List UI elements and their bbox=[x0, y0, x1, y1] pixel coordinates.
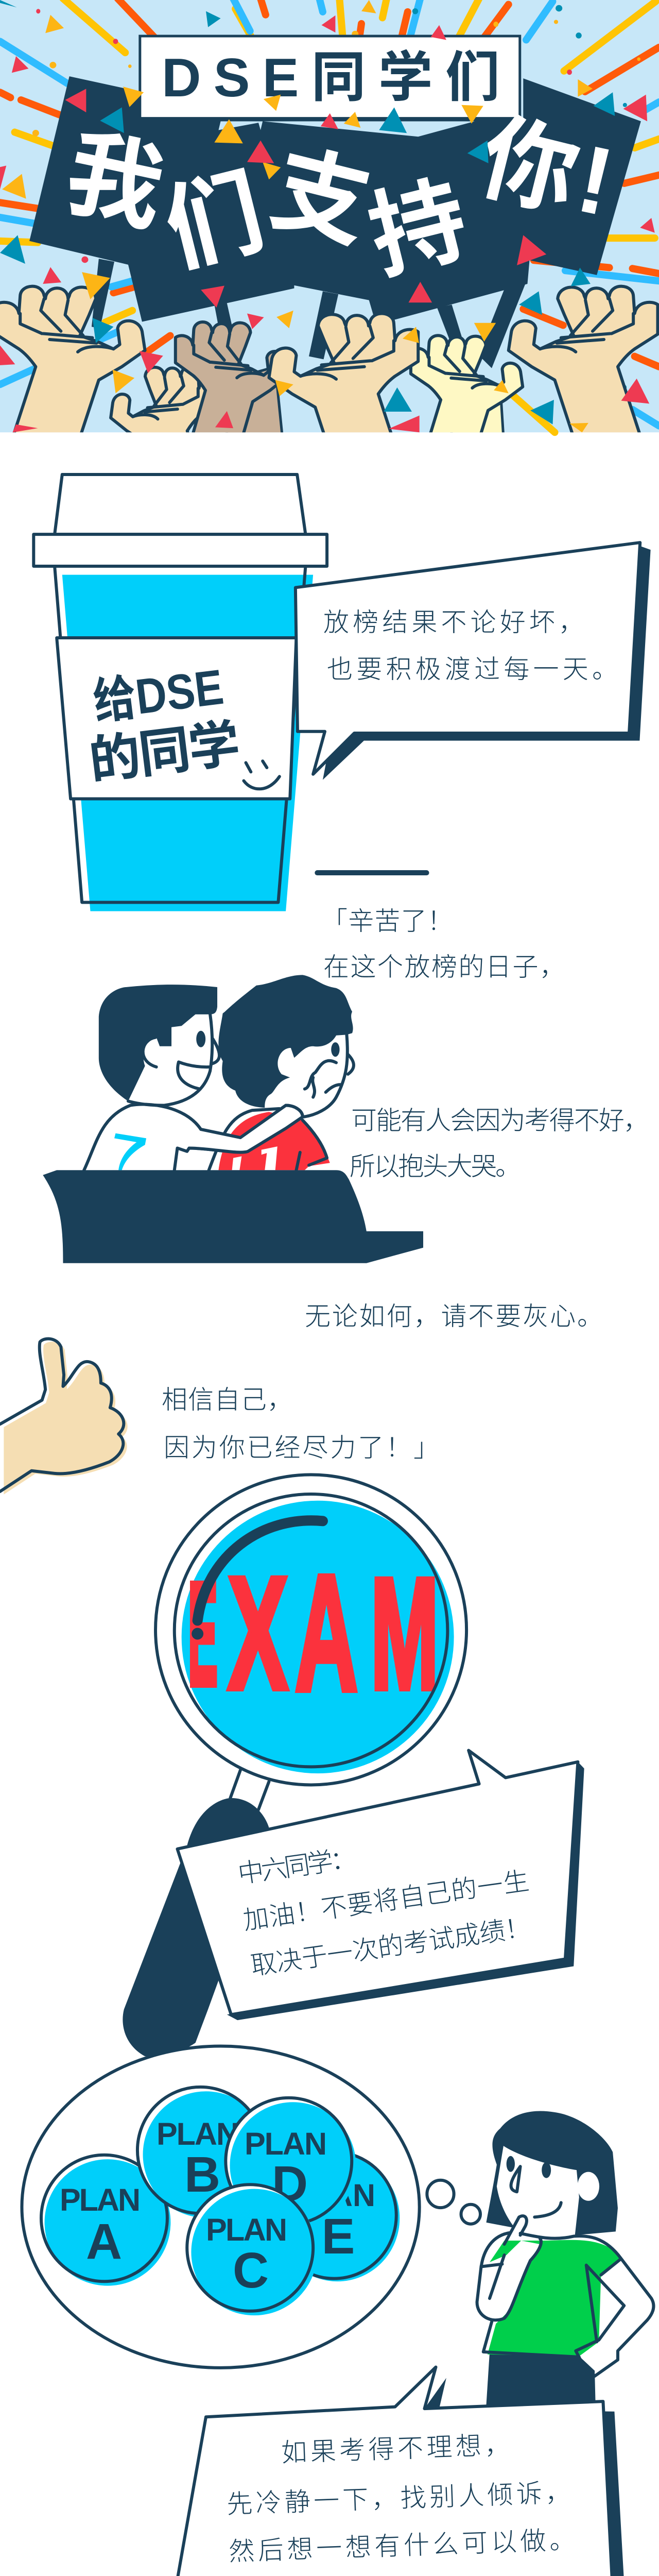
protest signs bbox=[29, 76, 641, 368]
encouragement text bbox=[162, 1385, 439, 1462]
speech bubble: form six message: 中六同学： bbox=[236, 1843, 358, 1889]
plan B bbox=[137, 2087, 269, 2218]
opening quote lines: 「辛苦了！ bbox=[322, 907, 453, 936]
plan E: E bbox=[322, 2208, 355, 2264]
consoling text: 可能有人会因为考得不好， bbox=[351, 1106, 649, 1135]
plan D bbox=[226, 2098, 356, 2229]
opening quote lines: 在这个放榜的日子， bbox=[323, 953, 565, 981]
plan C: C bbox=[233, 2242, 269, 2298]
friend in red shirt crying bbox=[189, 975, 354, 1170]
plan A: A bbox=[86, 2213, 122, 2269]
plan A bbox=[41, 2155, 170, 2286]
crowd of raised hands bbox=[0, 286, 658, 488]
hero background and streamers bbox=[0, 0, 659, 432]
divider dash bbox=[317, 870, 427, 875]
headline: 我们支持你！: ! bbox=[568, 125, 622, 236]
takeaway cup illustration bbox=[33, 474, 327, 911]
headline: 我们支持你！: 我 bbox=[57, 120, 173, 244]
headline: 我们支持你！: 你 bbox=[470, 103, 589, 230]
title plate: DSE同学们 bbox=[162, 47, 500, 108]
speech bubble: if results are poor: 然后想一想有什么可以做。 bbox=[228, 2526, 576, 2566]
hero banner bbox=[0, 0, 659, 436]
consoling text: 所以抱头大哭。 bbox=[350, 1152, 521, 1181]
plan C: PLAN bbox=[206, 2212, 287, 2247]
confetti triangles bbox=[0, 0, 655, 432]
plan D: PLAN bbox=[245, 2126, 327, 2161]
headline: 我们支持你！: 持 bbox=[359, 165, 478, 292]
encouragement text: 因为你已经尽力了！」 bbox=[164, 1433, 439, 1462]
EXAM lettering: M bbox=[371, 1546, 439, 1722]
speech bubble: if results are poor bbox=[176, 2367, 626, 2576]
friend in white shirt bbox=[84, 985, 303, 1170]
two friends consoling at a desk bbox=[43, 975, 423, 1263]
plan E: PLAN bbox=[290, 2178, 375, 2213]
EXAM lettering: A bbox=[295, 1540, 358, 1725]
plan E bbox=[272, 2152, 400, 2281]
opening quote lines bbox=[322, 907, 565, 981]
speech bubble: results message: 也要积极渡过每一天。 bbox=[327, 655, 618, 684]
desk bbox=[43, 1170, 423, 1263]
encouragement text: 相信自己， bbox=[162, 1385, 293, 1414]
plan B: B bbox=[184, 2146, 220, 2202]
thinking girl in green shirt bbox=[477, 2111, 654, 2405]
EXAM lettering bbox=[188, 1540, 439, 1725]
plan A: PLAN bbox=[60, 2182, 141, 2217]
title plate bbox=[140, 36, 521, 120]
plan C bbox=[187, 2184, 317, 2315]
EXAM lettering: E bbox=[188, 1552, 218, 1716]
cup sleeve lettering: 的同学 bbox=[86, 715, 243, 790]
EXAM lettering: X bbox=[228, 1544, 288, 1722]
icon: thumbs up bbox=[0, 1338, 128, 1495]
headline: 我们支持你！ bbox=[57, 103, 622, 292]
plan D: D bbox=[272, 2156, 308, 2212]
headline: 我们支持你！: 支 bbox=[262, 134, 380, 261]
speech bubble: form six message: 取决于一次的考试成绩！ bbox=[249, 1912, 532, 1980]
speech bubble: results message: 放榜结果不论好坏， bbox=[323, 608, 584, 637]
thought bubble with plans bbox=[22, 2046, 480, 2368]
cup sleeve lettering: 给DSE bbox=[91, 659, 227, 730]
cup drawing bbox=[33, 474, 327, 911]
headline: 我们支持你！: 们 bbox=[155, 158, 274, 285]
cup sleeve lettering bbox=[86, 659, 243, 790]
consoling text bbox=[305, 1106, 649, 1331]
speech bubble: form six message bbox=[177, 1750, 584, 2020]
speech bubble: results message bbox=[296, 543, 651, 780]
magnifying glass over EXAM bbox=[123, 1475, 466, 2056]
speech bubble: form six message: 加油！不要将自己的一生 bbox=[241, 1867, 531, 1935]
plan B: PLAN bbox=[157, 2116, 239, 2151]
speech bubble: if results are poor: 先冷静一下，找别人倾诉， bbox=[226, 2478, 571, 2519]
consoling text: 无论如何，请不要灰心。 bbox=[305, 1302, 603, 1331]
speech bubble: if results are poor: 如果考得不理想， bbox=[281, 2430, 511, 2467]
